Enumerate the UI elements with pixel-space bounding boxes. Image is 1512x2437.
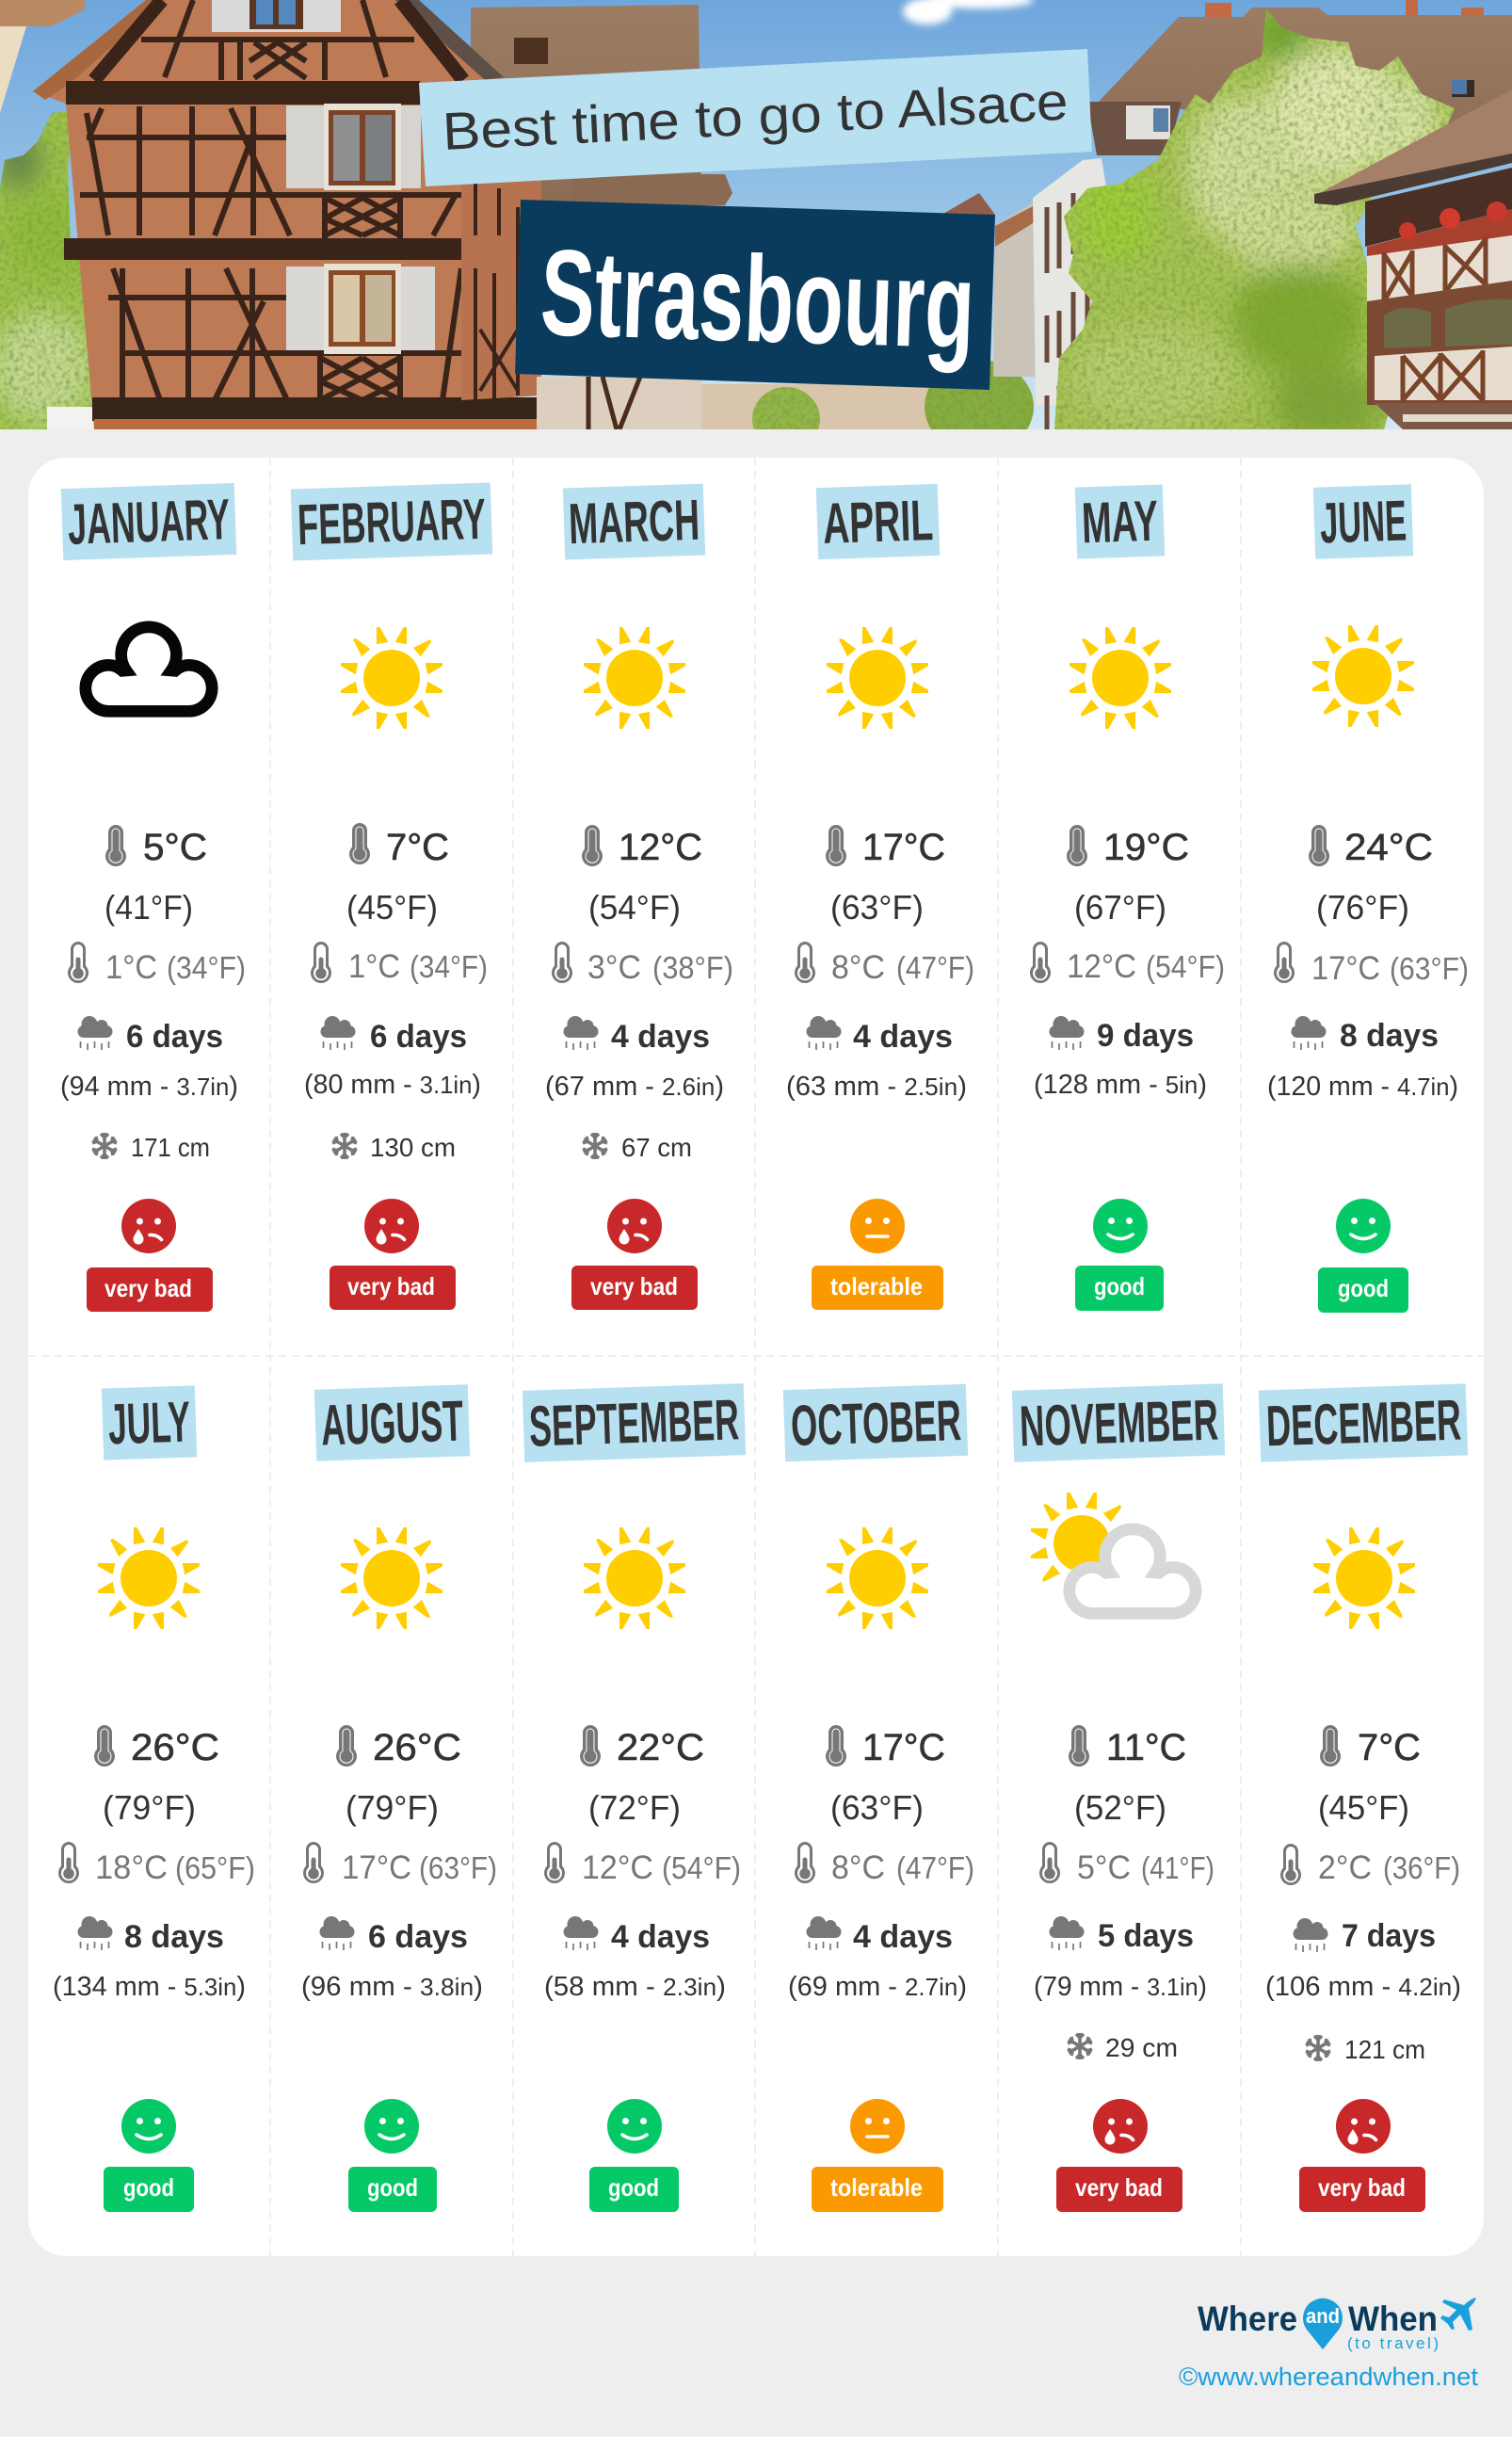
icon: crying face [121,1199,176,1253]
low temperature: (63°F) [1390,951,1469,986]
rainfall: (58 mm - 2.3in) [544,1972,726,2002]
low temperature: 12°C [582,1849,653,1886]
rain days: 9 days [1097,1018,1194,1054]
low temperature: (47°F) [896,1850,974,1885]
heading: April [816,484,940,559]
rating badge: very bad [1318,2173,1406,2202]
low temperature: 17°C [342,1849,411,1886]
average temperature in Fahrenheit: (41°F) [105,888,193,927]
banner: Strasbourg [515,200,995,390]
average temperature in Fahrenheit: (63°F) [830,1788,924,1827]
average temperature: 12°C [619,827,702,868]
rating badge: good [608,2173,659,2202]
house [33,0,504,429]
heading: September: SEPTEMBER [528,1387,740,1459]
panel: September [523,1383,746,2212]
rain days [320,1916,468,1955]
icon: smiling face [1336,1199,1391,1253]
heading: March: MARCH [568,488,700,556]
average temperature [94,1725,219,1768]
average temperature [336,1725,461,1768]
low temperature: 3°C [587,949,641,986]
rating badge: very bad [105,1274,192,1302]
rating badge: very bad [1075,2173,1163,2202]
rain days: 4 days [611,1019,710,1055]
icon: crying face [607,1199,662,1253]
icon: sun [827,1527,928,1629]
panel: November [1012,1383,1225,2212]
low temperature [795,942,974,986]
icon: sun [584,627,685,729]
icon: neutral face [850,1199,905,1253]
low temperature: 5°C [1077,1849,1131,1886]
banner: Best time to go to Alsace [419,49,1092,186]
rating badge: good [1338,1274,1389,1302]
logo: Where and When to travel: Where [1198,2300,1297,2338]
low temperature: 12°C [1067,948,1136,985]
rainfall: (106 mm - 4.2in) [1265,1972,1461,2002]
average temperature [105,825,207,868]
low temperature: (34°F) [167,950,246,985]
icon: sun [1313,1527,1415,1629]
panel: June [1267,484,1469,1313]
rain days: 5 days [1098,1918,1194,1954]
panel: March [545,484,733,1310]
low temperature: 8°C [831,949,885,986]
snowfall [1068,2033,1178,2062]
snowfall: 130 cm [370,1133,456,1162]
rain days [806,1916,953,1955]
average temperature in Fahrenheit: (72°F) [588,1788,681,1827]
average temperature in Fahrenheit: (45°F) [346,888,438,927]
big tree [1045,0,1459,443]
low temperature [1280,1844,1460,1886]
heading: January: JANUARY [67,487,231,557]
low temperature [552,942,733,986]
heading: July [102,1385,197,1461]
low temperature [1274,942,1469,987]
average temperature: 24°C [1344,827,1433,868]
low temperature: 2°C [1318,1849,1372,1886]
low temperature: 8°C [831,1849,885,1886]
heading: November: NOVEMBER [1019,1388,1219,1458]
low temperature: (41°F) [1141,1850,1214,1885]
icon: neutral face [850,2099,905,2154]
icon: crying face [364,1199,419,1253]
rating badge: tolerable [830,1272,923,1300]
low temperature: (65°F) [175,1850,255,1885]
rainfall: (134 mm - 5.3in) [53,1972,246,2002]
panel: December [1259,1383,1468,2212]
rain days [806,1016,953,1055]
snowfall [332,1133,456,1162]
right roofs [1205,3,1231,18]
panel: January [60,483,246,1312]
low temperature [1030,942,1225,985]
icon: sun [1312,625,1414,727]
logo: Where and When to travel: and [1306,2304,1340,2328]
snowfall [583,1133,692,1162]
rain days [563,1916,710,1955]
low temperature: (34°F) [410,949,488,984]
rating badge [1075,1266,1164,1311]
banner: Best time to go to Alsace: Best time to go to Alsace [442,72,1070,161]
snowfall [92,1133,210,1162]
low temperature [311,942,488,985]
rain days [320,1016,467,1055]
heading: March [563,484,705,559]
average temperature: 17°C [862,1727,945,1768]
heading: August [314,1384,470,1461]
rating badge [571,1266,698,1310]
average temperature [580,1725,704,1768]
icon: sun [1070,627,1171,729]
low temperature: 1°C [348,948,400,985]
rain days [563,1016,710,1055]
heading: February: FEBRUARY [297,487,487,557]
average temperature: 7°C [1358,1727,1421,1768]
rating badge: good [123,2173,174,2202]
rating badge [330,1266,456,1310]
average temperature [1320,1725,1421,1768]
average temperature: 11°C [1106,1727,1186,1768]
rain days [77,1016,223,1055]
rating badge [1299,2167,1425,2212]
average temperature in Fahrenheit: (79°F) [103,1788,196,1827]
heading: May: MAY [1081,489,1159,555]
rating badge: good [367,2173,418,2202]
low temperature: 1°C [105,949,157,986]
rain days: 7 days [1342,1918,1436,1954]
rating badge [1056,2167,1182,2212]
average temperature in Fahrenheit: (52°F) [1074,1788,1166,1827]
panel: July [53,1385,255,2212]
rain days: 6 days [368,1919,468,1955]
rainfall: (63 mm - 2.5in) [786,1072,967,1102]
icon: sun behind cloud [1031,1493,1196,1613]
average temperature [1067,825,1189,868]
average temperature in Fahrenheit: (63°F) [830,888,924,927]
average temperature in Fahrenheit: (79°F) [346,1788,439,1827]
average temperature [349,823,449,868]
low temperature: 17°C [1311,950,1380,987]
low temperature: (38°F) [652,950,733,985]
right half-timbered house [1316,89,1512,200]
average temperature: 22°C [617,1727,704,1768]
rating badge [812,2167,943,2212]
logo: Where and When to travel [1198,2298,1476,2352]
rating badge: good [1094,1272,1145,1300]
icon: sun [98,1527,200,1629]
average temperature: 7°C [386,827,449,868]
heading: August: AUGUST [320,1388,464,1457]
snowfall: 67 cm [621,1133,692,1162]
average temperature [582,825,702,868]
icon: sun [584,1527,685,1629]
rain days [1292,1016,1439,1054]
rating badge: tolerable [830,2173,923,2202]
heading: October: OCTOBER [790,1388,962,1458]
rain days: 8 days [124,1919,224,1955]
snowfall [1306,2035,1425,2064]
rainfall: (120 mm - 4.7in) [1267,1072,1458,1102]
rain days: 4 days [853,1919,953,1955]
rainfall: (79 mm - 3.1in) [1034,1972,1207,2002]
low temperature: (63°F) [419,1850,497,1885]
average temperature in Fahrenheit: (67°F) [1074,888,1166,927]
low temperature [1039,1842,1214,1886]
icon: smiling face [1093,1199,1148,1253]
low temperature [68,942,246,986]
average temperature [1069,1725,1186,1768]
banner: Strasbourg: Strasbourg [539,223,976,374]
left tree [0,111,92,429]
icon: sun [341,627,442,729]
back roofs [471,5,700,205]
average temperature [1309,825,1433,868]
snowfall: 29 cm [1105,2033,1178,2062]
heading: September [523,1383,746,1462]
rain days: 4 days [611,1919,710,1955]
icon: crying face [1336,2099,1391,2154]
average temperature in Fahrenheit: (54°F) [588,888,681,927]
logo: Where and When to travel: (to travel) [1347,2334,1439,2352]
icon: smiling face [364,2099,419,2154]
heading: June [1313,484,1413,559]
rainfall: (96 mm - 3.8in) [301,1972,483,2002]
rating badge [1318,1267,1408,1313]
rain days [77,1916,224,1955]
rain days [1294,1918,1436,1954]
panel: August [301,1384,497,2212]
rating badge: very bad [347,1272,435,1300]
low temperature: (47°F) [896,950,974,985]
panel: April [786,484,974,1310]
rating badge [589,2167,679,2212]
snowfall: 121 cm [1344,2035,1425,2064]
icon: cloud [86,627,212,711]
low temperature: 18°C [95,1849,168,1886]
low temperature [795,1842,974,1886]
rating badge [812,1266,943,1310]
rain days: 4 days [853,1019,953,1055]
logo: Where and When to travel: When [1348,2300,1438,2338]
heading: April: APRIL [822,488,934,556]
panel: May [1030,484,1225,1311]
average temperature: 26°C [373,1727,461,1768]
heading: February [291,483,492,560]
low temperature [58,1842,255,1886]
icon: sun [341,1527,442,1629]
rating badge: very bad [590,1272,678,1300]
rain days: 8 days [1340,1018,1439,1054]
low temperature: (54°F) [1146,949,1225,984]
icon: smiling face [121,2099,176,2154]
panel: monthly calendar [28,458,1484,2256]
rainfall: (80 mm - 3.1in) [304,1070,481,1100]
icon: sun [827,627,928,729]
rainfall: (67 mm - 2.6in) [545,1072,724,1102]
panel: October [783,1384,974,2212]
average temperature: 5°C [143,827,207,868]
low temperature: (36°F) [1383,1850,1460,1885]
website credit: ©www.whereandwhen.net [1179,2363,1478,2391]
rain days [1049,1916,1194,1954]
rating badge [104,2167,194,2212]
heading: May [1075,484,1165,559]
heading: June: JUNE [1319,488,1407,556]
heading: July: JULY [107,1390,191,1456]
low temperature: (54°F) [662,1850,741,1885]
hero photo: half-timbered houses of Strasbourg [0,0,1512,454]
average temperature: 17°C [862,827,945,868]
icon: smiling face [607,2099,662,2154]
rain days: 6 days [126,1019,223,1055]
rain days: 6 days [370,1019,467,1055]
windows [212,0,341,32]
central buildings [537,377,701,429]
heading: October [783,1384,968,1461]
rainfall: (128 mm - 5in) [1034,1070,1207,1100]
rainfall: (69 mm - 2.7in) [788,1972,967,2002]
low temperature [544,1842,741,1886]
rating badge [348,2167,437,2212]
average temperature: 26°C [131,1727,219,1768]
rating badge [87,1267,213,1312]
icon: crying face [1093,2099,1148,2154]
heading: January [61,483,236,560]
panel: February [291,483,492,1310]
rainfall: (94 mm - 3.7in) [60,1072,238,1102]
average temperature in Fahrenheit: (76°F) [1316,888,1409,927]
average temperature [826,1725,945,1768]
low temperature [303,1842,497,1886]
average temperature in Fahrenheit: (45°F) [1318,1788,1409,1827]
heading: November [1012,1383,1225,1462]
rain days [1049,1016,1194,1054]
snowfall: 171 cm [131,1133,210,1162]
average temperature: 19°C [1103,827,1189,868]
average temperature [826,825,945,868]
